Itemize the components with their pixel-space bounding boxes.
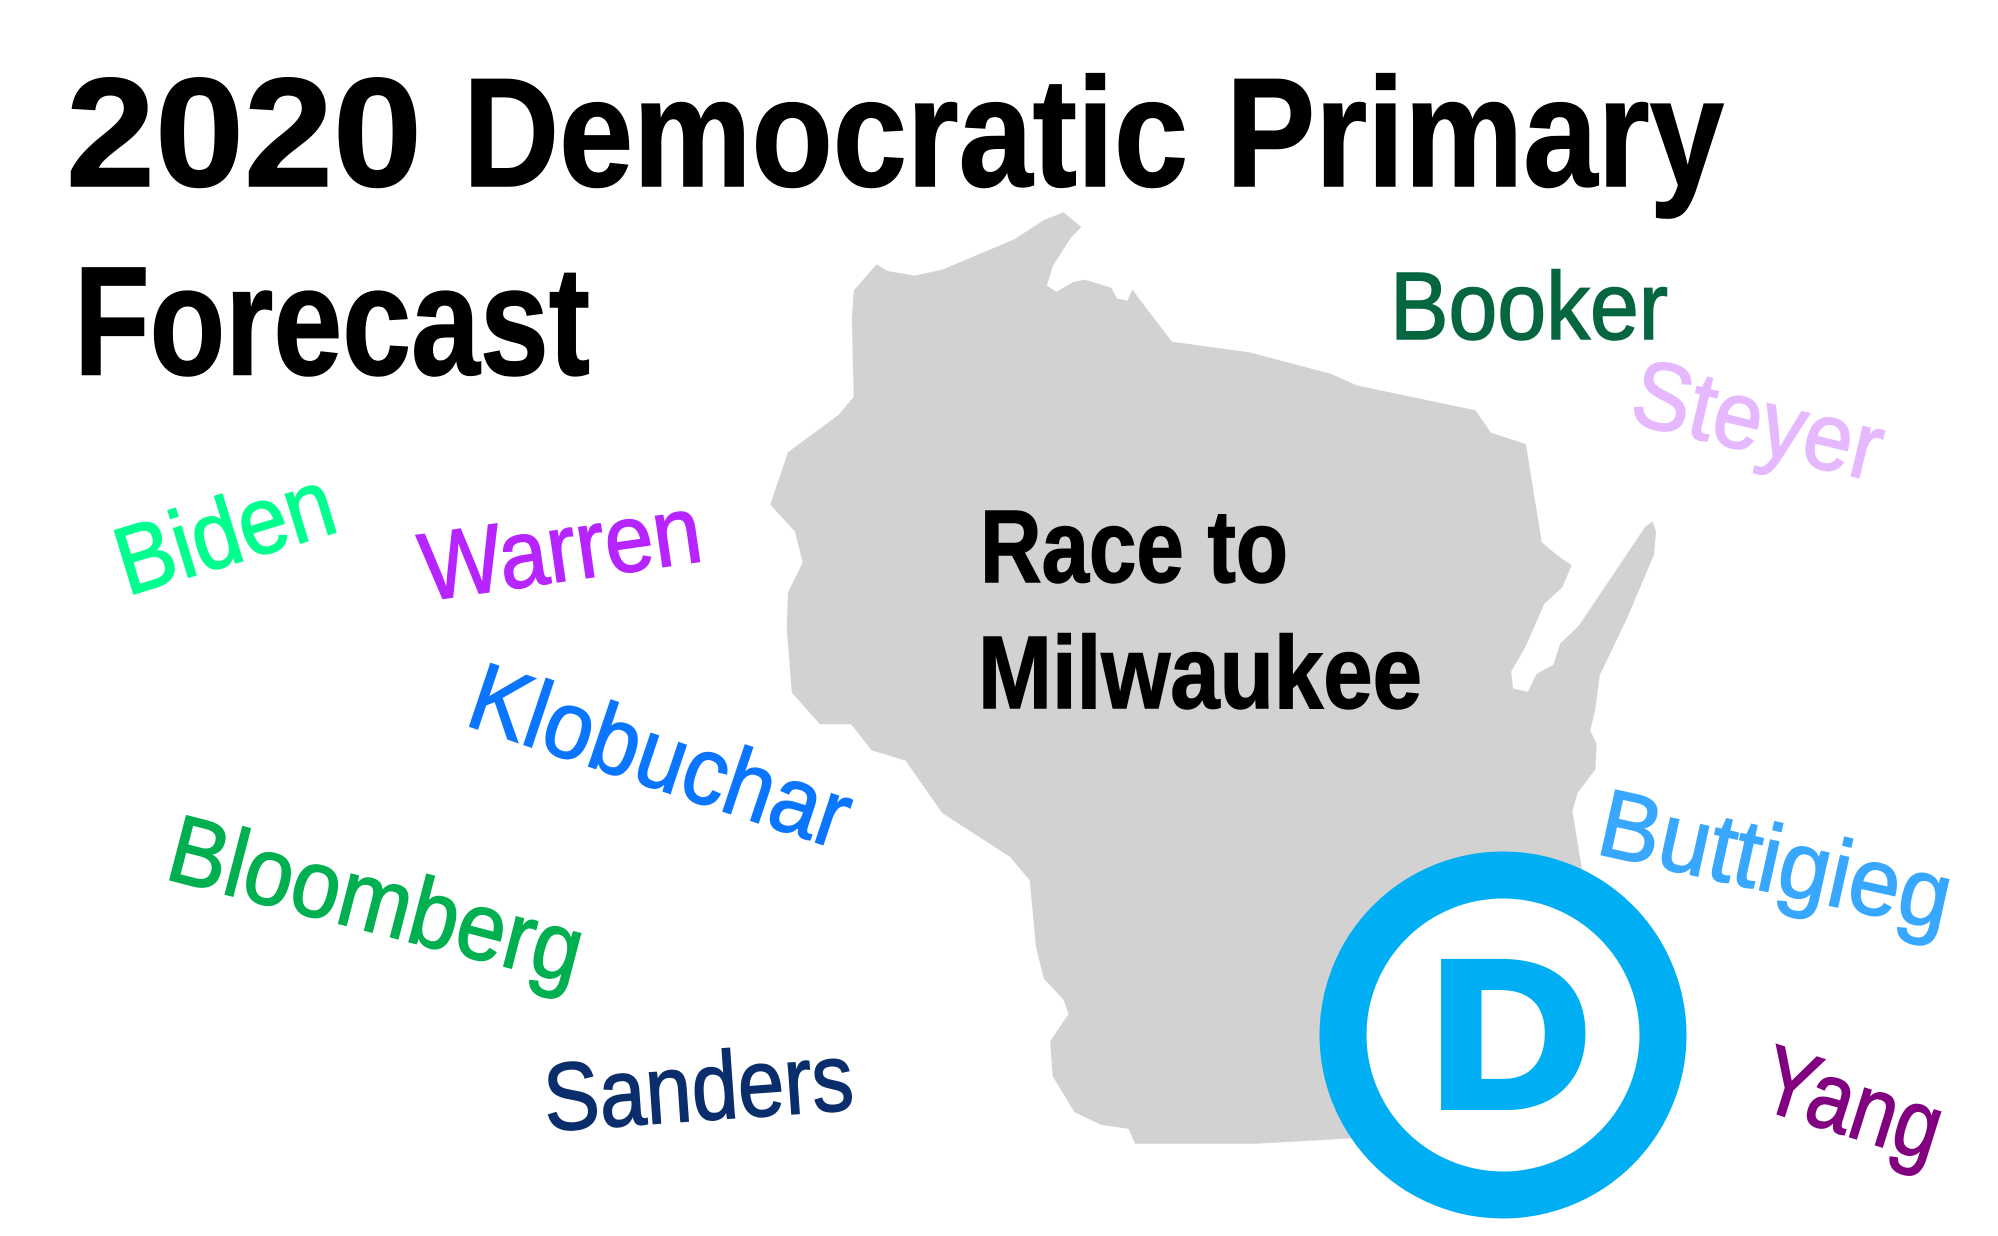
- title: 2020: [66, 46, 422, 219]
- title: Democratic: [463, 46, 1188, 219]
- candidate: Warren: Warren: [413, 476, 708, 622]
- candidate: Steyer: Steyer: [1622, 338, 1894, 502]
- candidate: Yang: Yang: [1749, 1025, 1956, 1182]
- candidate: Booker: Booker: [1390, 253, 1668, 360]
- icon: Democratic party logo: [1343, 875, 1663, 1195]
- candidate: Sanders: Sanders: [540, 1024, 857, 1152]
- candidate: Bloomberg: Bloomberg: [158, 795, 595, 1004]
- candidate: Buttigieg: Buttigieg: [1589, 769, 1962, 951]
- candidate: Klobuchar: Klobuchar: [456, 642, 865, 869]
- title: Forecast: [74, 234, 590, 408]
- map: Wisconsin: [770, 212, 1656, 1144]
- map label: Race to: [980, 489, 1288, 604]
- map label: [978, 489, 1422, 730]
- map label: Milwaukee: [978, 615, 1422, 730]
- title: [66, 46, 1724, 408]
- candidate: Biden: Biden: [102, 448, 347, 616]
- icon: Democratic party logo: D: [1430, 919, 1590, 1151]
- title: Primary: [1226, 46, 1724, 219]
